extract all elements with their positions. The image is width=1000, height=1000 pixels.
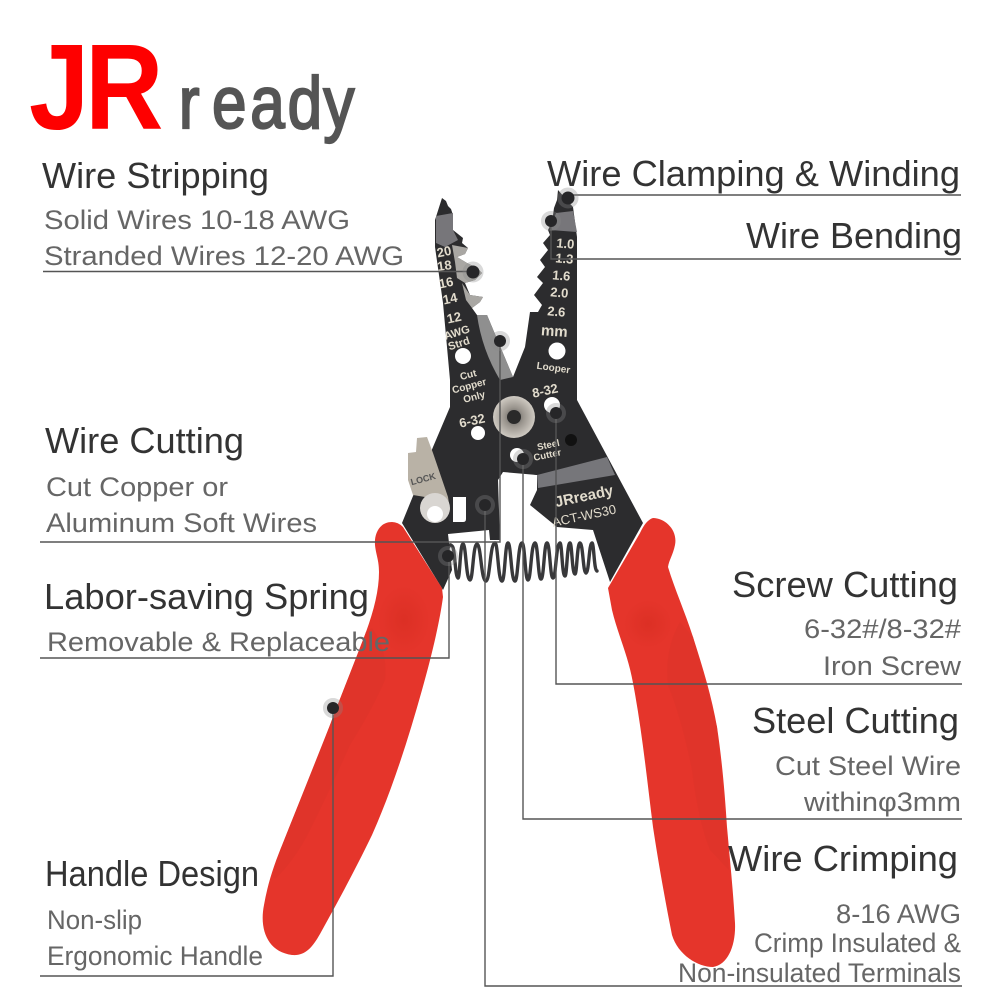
callout: wire bending: Wire Bending bbox=[746, 215, 962, 256]
tool markings: 8-32 bbox=[531, 381, 559, 401]
tool markings: 18 bbox=[436, 257, 453, 274]
callout: wire bending bbox=[545, 215, 962, 259]
callout: labor-saving spring: Labor-saving Spring bbox=[44, 576, 369, 617]
tool markings: Copper bbox=[451, 377, 488, 396]
tool markings: 2.6 bbox=[547, 303, 566, 320]
left handle bbox=[263, 522, 443, 955]
tool markings: 6-32 bbox=[458, 411, 486, 431]
right jaw and body bbox=[498, 190, 643, 582]
tool markings: 2.0 bbox=[550, 284, 569, 301]
tool markings: 20 bbox=[435, 243, 453, 260]
tool markings: 1.3 bbox=[555, 250, 574, 267]
tool markings: Looper bbox=[536, 361, 571, 376]
callout: wire cutting bbox=[40, 335, 506, 542]
tool markings: 1.6 bbox=[552, 267, 571, 284]
callout: labor-saving spring bbox=[40, 550, 454, 658]
holes bbox=[453, 342, 566, 522]
right handle bbox=[608, 518, 735, 967]
tool markings: ACT-WS30 bbox=[551, 502, 617, 530]
callout: wire crimping: Non-insulated Terminals bbox=[678, 958, 961, 988]
callout: labor-saving spring: Removable & Replaceable bbox=[47, 627, 390, 657]
tool markings: Strd bbox=[447, 335, 471, 353]
grey band bbox=[537, 457, 615, 488]
callout: screw cutting bbox=[550, 407, 962, 684]
tool markings: Steel bbox=[536, 438, 561, 453]
tool markings: mm bbox=[540, 322, 568, 341]
logo: JRready: ready bbox=[179, 63, 354, 144]
pivot bolt bbox=[493, 396, 535, 438]
callout: wire clamping and winding: Wire Clamping & Winding bbox=[547, 153, 960, 194]
callout: steel cutting bbox=[517, 453, 962, 819]
callout: screw cutting: 6-32#/8-32# bbox=[804, 614, 961, 644]
callout: handle design: Handle Design bbox=[45, 853, 259, 894]
callout: handle design: Non-slip bbox=[47, 905, 142, 935]
tool markings: 1.0 bbox=[556, 235, 575, 252]
callout: wire cutting: Cut Copper or bbox=[46, 472, 228, 502]
tool markings: AWG bbox=[443, 323, 471, 343]
callout: steel cutting: withinφ3mm bbox=[803, 787, 961, 817]
callout: wire stripping: Stranded Wires 12-20 AWG bbox=[44, 241, 404, 271]
tool markings: 12 bbox=[445, 309, 463, 326]
jaw tip highlights bbox=[436, 211, 577, 247]
callout: screw cutting: Screw Cutting bbox=[732, 564, 958, 605]
tool markings: Cutter bbox=[533, 447, 563, 464]
callout: wire cutting: Wire Cutting bbox=[45, 420, 244, 461]
callout: wire stripping: Wire Stripping bbox=[42, 155, 269, 196]
callout: screw cutting: Iron Screw bbox=[823, 651, 962, 681]
callout: wire crimping: 8-16 AWG bbox=[836, 899, 961, 929]
lock slider bbox=[408, 437, 450, 510]
callout: wire crimping: Wire Crimping bbox=[728, 838, 958, 879]
tool markings: 14 bbox=[441, 290, 459, 307]
callout: handle design bbox=[40, 702, 339, 976]
tool markings: Cut bbox=[459, 368, 478, 383]
callout: wire cutting: Aluminum Soft Wires bbox=[46, 508, 317, 538]
callout: wire stripping bbox=[42, 155, 480, 278]
callout: handle design: Ergonomic Handle bbox=[47, 941, 263, 971]
tool: wire stripper: LOCK bbox=[410, 471, 437, 487]
tool: wire stripper bbox=[263, 190, 735, 967]
tool markings: Only bbox=[462, 389, 487, 406]
tool markings: JRready bbox=[553, 482, 615, 511]
tool markings: 16 bbox=[437, 274, 455, 291]
callout: wire stripping: Solid Wires 10-18 AWG bbox=[44, 205, 350, 235]
logo: JRready bbox=[29, 19, 354, 155]
callout: wire crimping: Crimp Insulated & bbox=[754, 928, 961, 958]
callout: wire crimping bbox=[479, 499, 962, 988]
callout: steel cutting: Steel Cutting bbox=[752, 700, 959, 741]
logo: JRready: JR bbox=[29, 19, 163, 155]
spring bbox=[447, 543, 597, 581]
left jaw and body bbox=[402, 198, 537, 590]
stripping teeth silver bbox=[452, 245, 483, 308]
tool markings bbox=[435, 235, 617, 530]
cutter blade bbox=[477, 315, 513, 380]
callout: steel cutting: Cut Steel Wire bbox=[775, 751, 961, 781]
